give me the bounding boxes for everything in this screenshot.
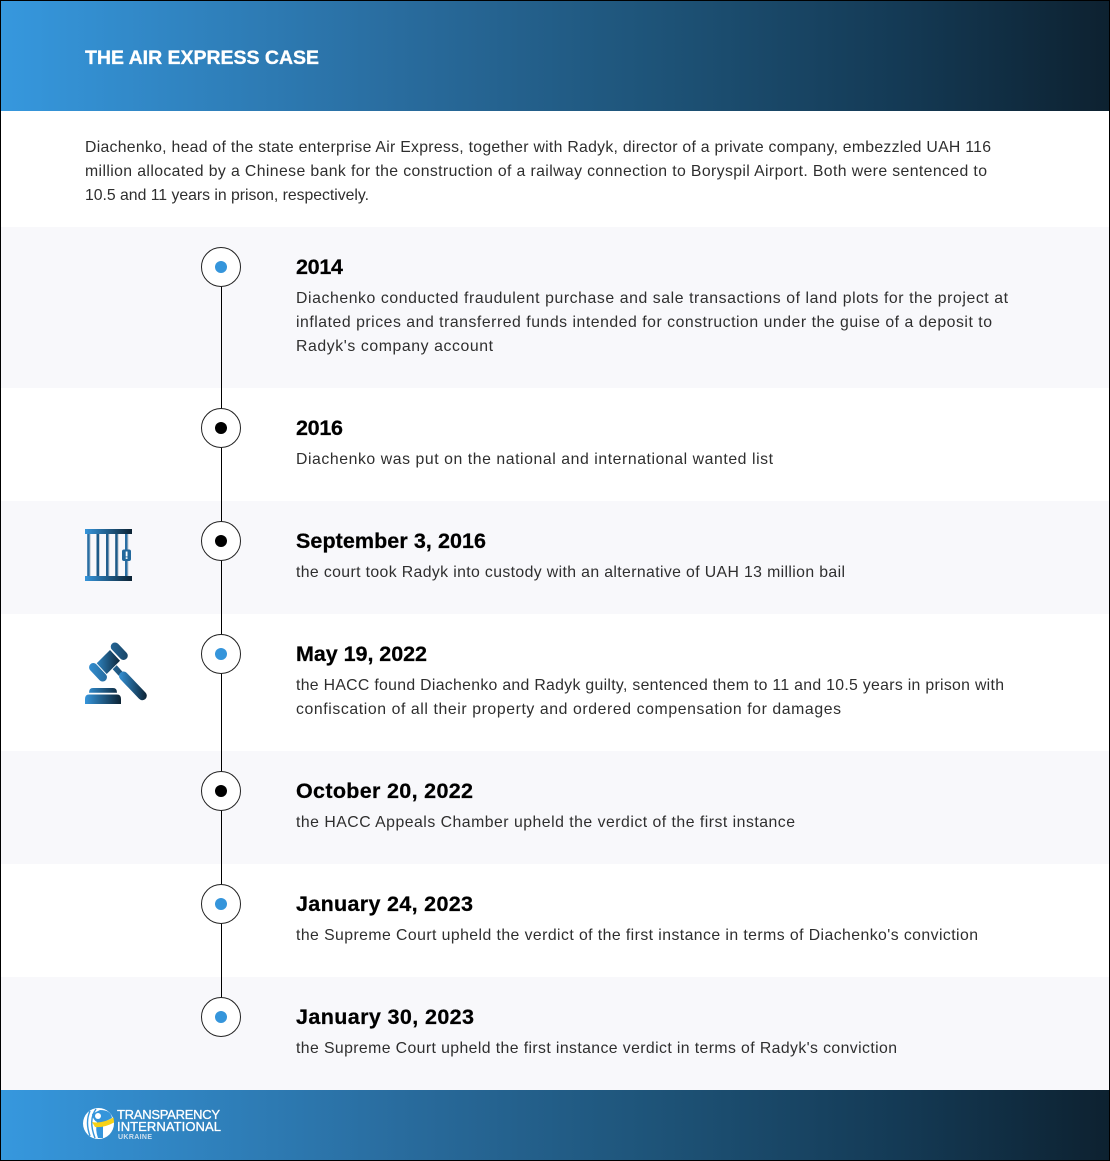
intro text: Diachenko, head of the state enterprise Air Express, together with Radyk, director of a private company, embezzled UAH 116: [85, 139, 991, 156]
logo: Transparency International Ukraine: [83, 1107, 221, 1141]
event: October 20, 2022: October 20, 2022: [296, 779, 473, 803]
marker: January 30, 2023: [202, 998, 240, 1036]
event: January 24, 2023: the Supreme Court upheld the verdict of the first instance in terms of Diachenko's conviction: [296, 927, 978, 944]
event: September 3, 2016: [296, 529, 845, 581]
event: January 30, 2023: January 30, 2023: [296, 1005, 474, 1029]
icon: gavel: [85, 647, 142, 704]
marker: 2014: [202, 248, 240, 286]
event: January 30, 2023: the Supreme Court upheld the first instance verdict in terms of Radyk's conviction: [296, 1040, 897, 1057]
logo: Transparency International Ukraine: INTERNATIONAL: [117, 1119, 221, 1134]
event: 2016: 2016: [296, 416, 343, 440]
event: October 20, 2022: the HACC Appeals Chamber upheld the verdict of the first instance: [296, 814, 795, 831]
event: October 20, 2022: [296, 779, 795, 831]
intro text: million allocated by a Chinese bank for the construction of a railway connection to Boryspil Airport. Both were sentenced to: [85, 163, 987, 180]
marker: 2016: [202, 408, 240, 448]
logo: Transparency International Ukraine: TRANSPARENCY: [117, 1107, 220, 1122]
marker: January 24, 2023: [202, 884, 240, 924]
event: 2016: Diachenko was put on the national and international wanted list: [296, 451, 774, 468]
event: 2014: 2014: [296, 255, 343, 279]
event: September 3, 2016: September 3, 2016: [296, 529, 486, 553]
event: 2014: Radyk's company account: [296, 338, 494, 355]
intro text: 10.5 and 11 years in prison, respectively.: [85, 187, 369, 204]
marker: May 19, 2022: [202, 634, 240, 674]
event: May 19, 2022: confiscation of all their property and ordered compensation for damages: [296, 701, 841, 718]
event: May 19, 2022: May 19, 2022: [296, 642, 427, 666]
event: September 3, 2016: the court took Radyk into custody with an alternative of UAH 13 million bail: [296, 564, 845, 581]
marker: September 3, 2016: [202, 522, 240, 560]
logo: Transparency International Ukraine: UKRAINE: [118, 1134, 152, 1141]
event: January 24, 2023: January 24, 2023: [296, 892, 473, 916]
marker: October 20, 2022: [202, 772, 240, 810]
icon: prison bars: [85, 529, 132, 581]
event: January 24, 2023: [296, 892, 978, 944]
title: THE AIR EXPRESS CASE: [85, 47, 319, 69]
event: 2014: Diachenko conducted fraudulent purchase and sale transactions of land plots for the project at: [296, 290, 1009, 307]
event: January 30, 2023: [296, 1005, 897, 1057]
timeline line and markers: [202, 248, 240, 1036]
event: 2016: [296, 416, 774, 468]
event: 2014: inflated prices and transferred funds intended for construction under the guise of a deposit to: [296, 314, 992, 331]
event: May 19, 2022: [296, 642, 1004, 718]
header banner: [0, 0, 1110, 111]
footer banner: [0, 1090, 1110, 1161]
intro text: [85, 139, 991, 204]
event: May 19, 2022: the HACC found Diachenko and Radyk guilty, sentenced them to 11 and 10.5 years in prison with: [296, 677, 1004, 694]
event: 2014: [296, 255, 1009, 355]
